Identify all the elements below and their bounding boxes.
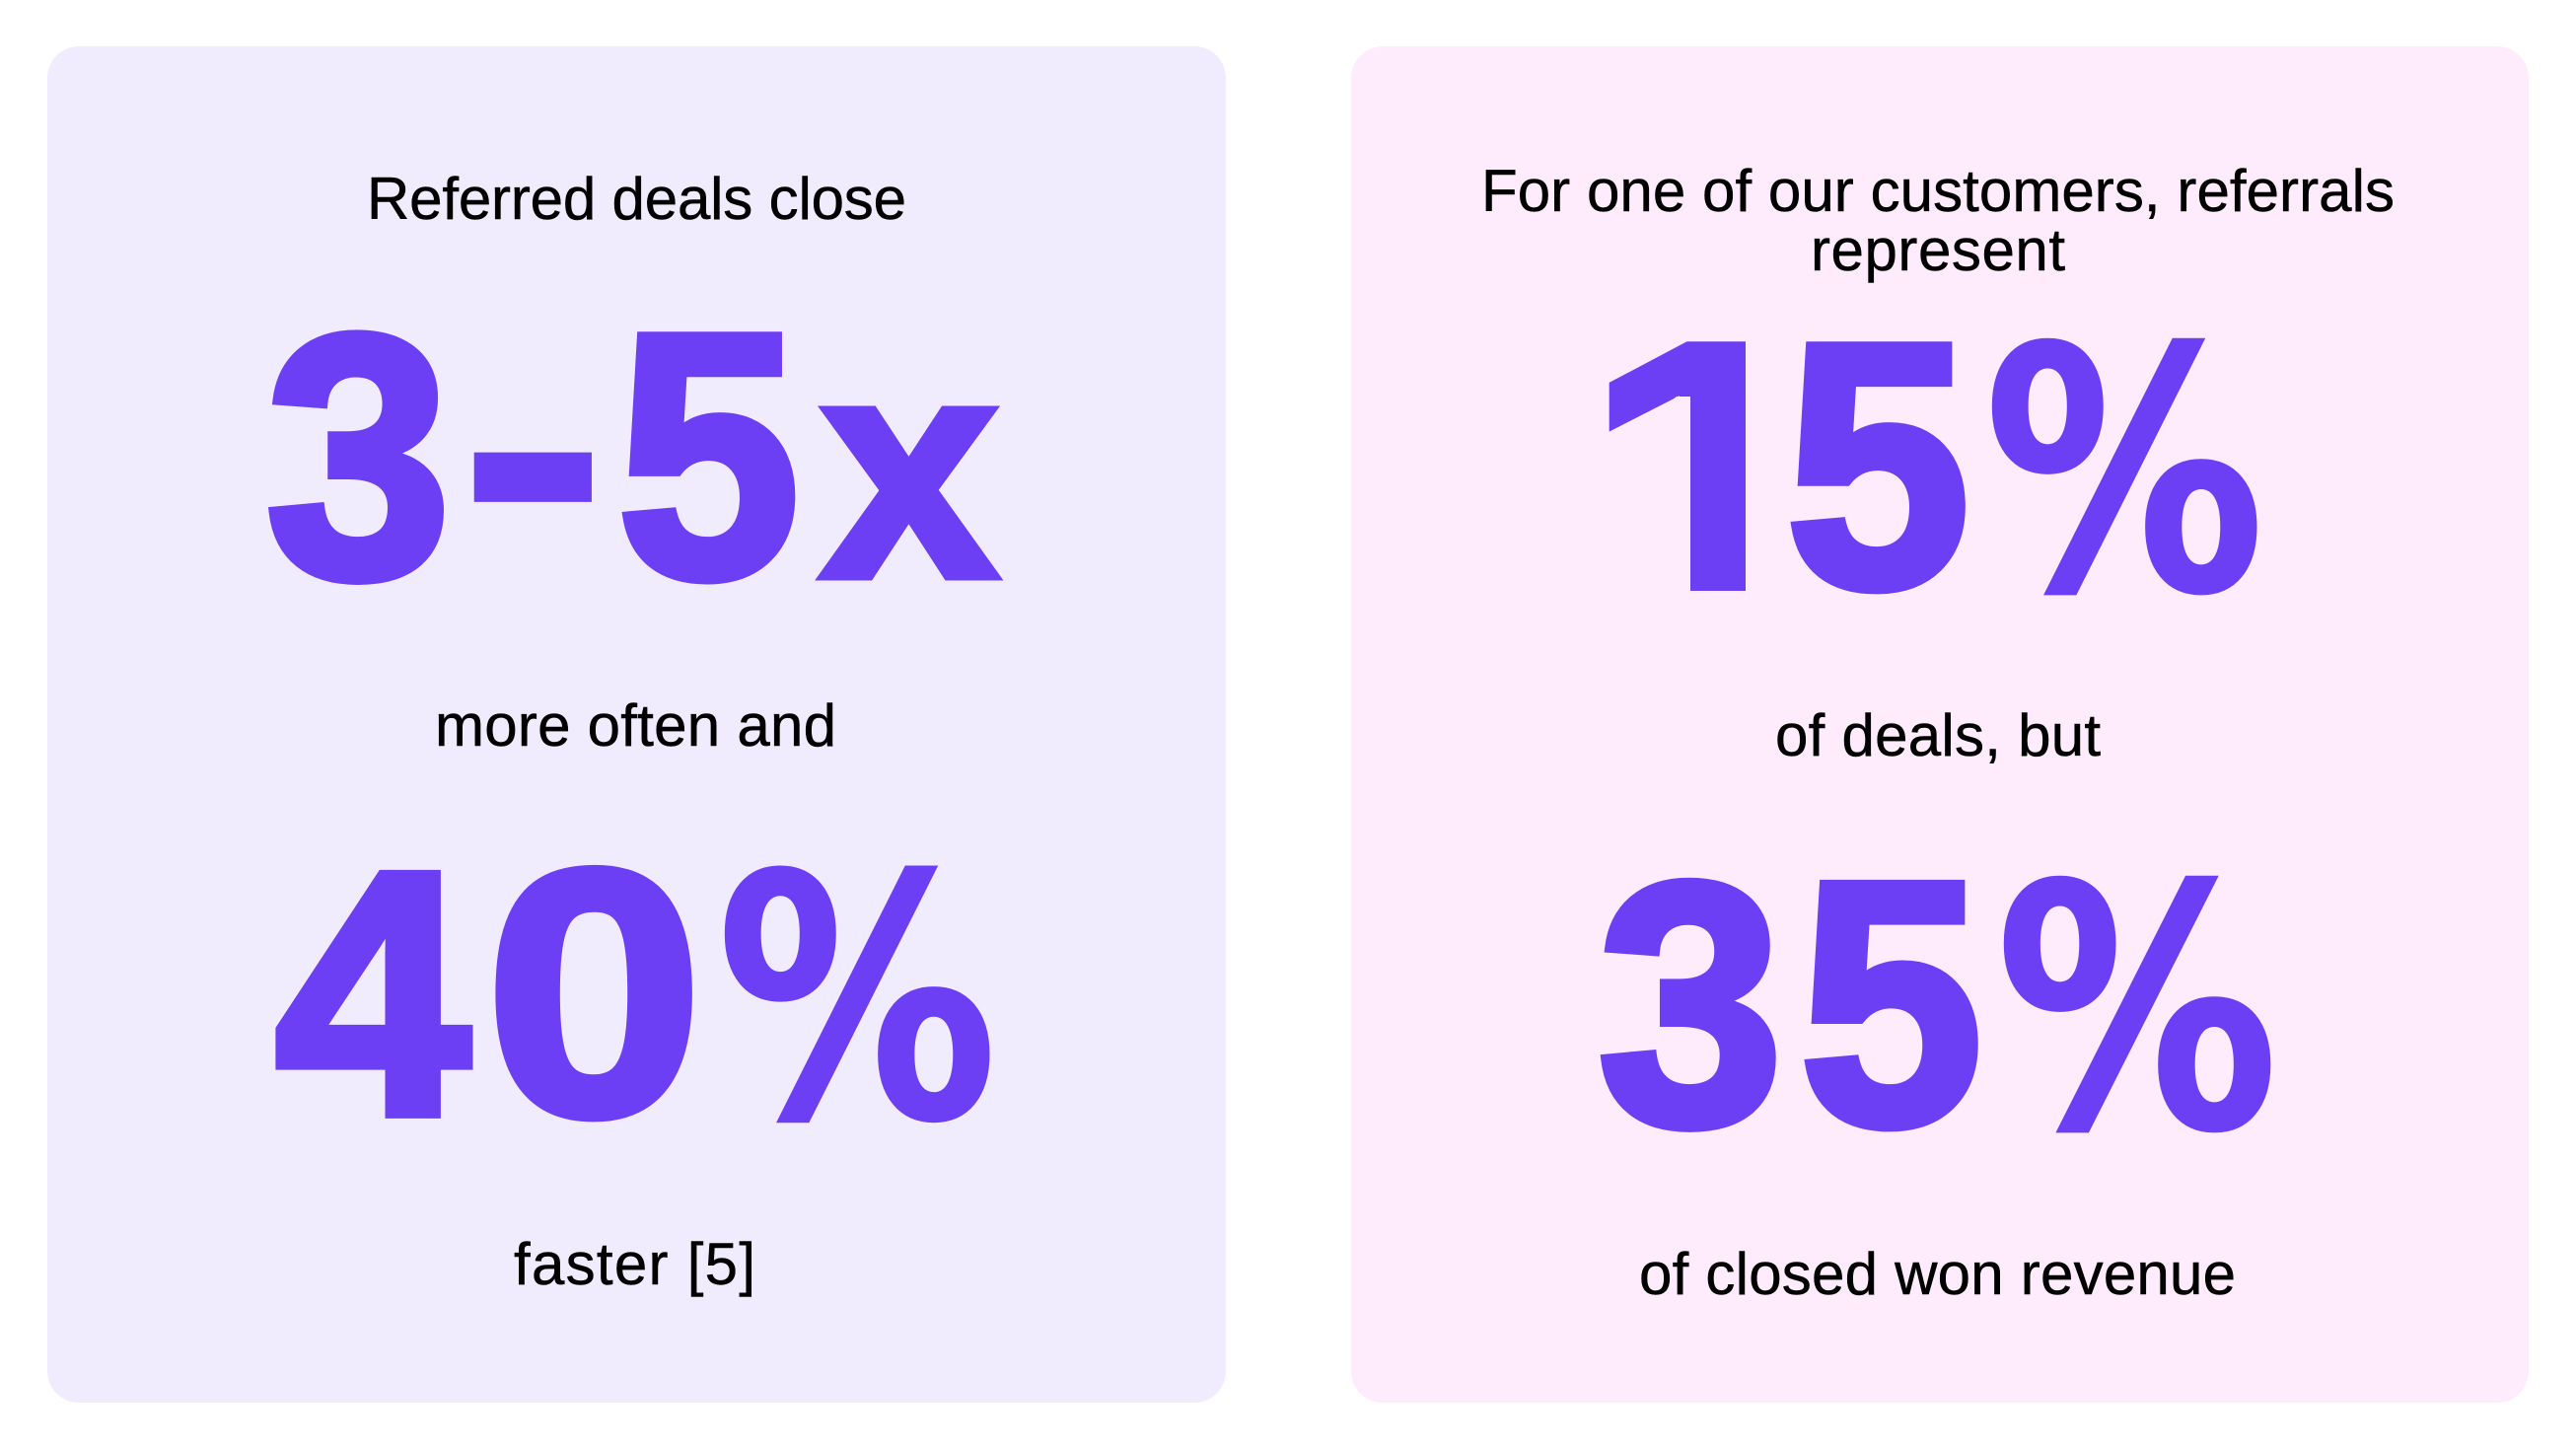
big stat: 15% xyxy=(1586,271,2264,670)
panel background: pink xyxy=(1351,46,2529,1403)
big stat: 40%: 0 xyxy=(485,798,703,1188)
big stat: 40%: % xyxy=(717,806,997,1197)
big stat: 35%: % xyxy=(1996,816,2278,1206)
text: For one of our customers, referrals: For one of our customers, referrals xyxy=(1481,158,2395,224)
text: Referred deals close: Referred deals close xyxy=(367,166,906,232)
big stat: 15%: 1 xyxy=(1586,271,1823,660)
text: represent: represent xyxy=(1811,217,2065,283)
panel: customer referrals xyxy=(1351,46,2529,1403)
big stat: 15%: % xyxy=(1984,278,2264,670)
text: faster [5]: faster [5] xyxy=(514,1231,755,1297)
text: more often and: more often and xyxy=(435,692,836,759)
big stat: 3-5x: 5 xyxy=(617,260,800,650)
big stat: 35% xyxy=(1598,809,2278,1206)
big stat: 35%: 3 xyxy=(1598,812,1783,1196)
big stat: 35%: 5 xyxy=(1800,809,1982,1197)
big stat: 3-5x: - xyxy=(464,259,603,636)
panel: referred deals xyxy=(47,46,1226,1403)
panel background: lavender xyxy=(47,46,1226,1403)
text: of closed won revenue: of closed won revenue xyxy=(1639,1241,2236,1307)
big stat: 3-5x: 3 xyxy=(266,262,451,649)
big stat: 3-5x xyxy=(266,259,999,650)
text: of deals, but: of deals, but xyxy=(1775,702,2101,768)
big stat: 3-5x: x xyxy=(822,292,999,643)
big stat: 15%: 5 xyxy=(1786,271,1969,661)
big stat: 40% xyxy=(275,798,997,1197)
big stat: 40%: 4 xyxy=(275,799,472,1188)
